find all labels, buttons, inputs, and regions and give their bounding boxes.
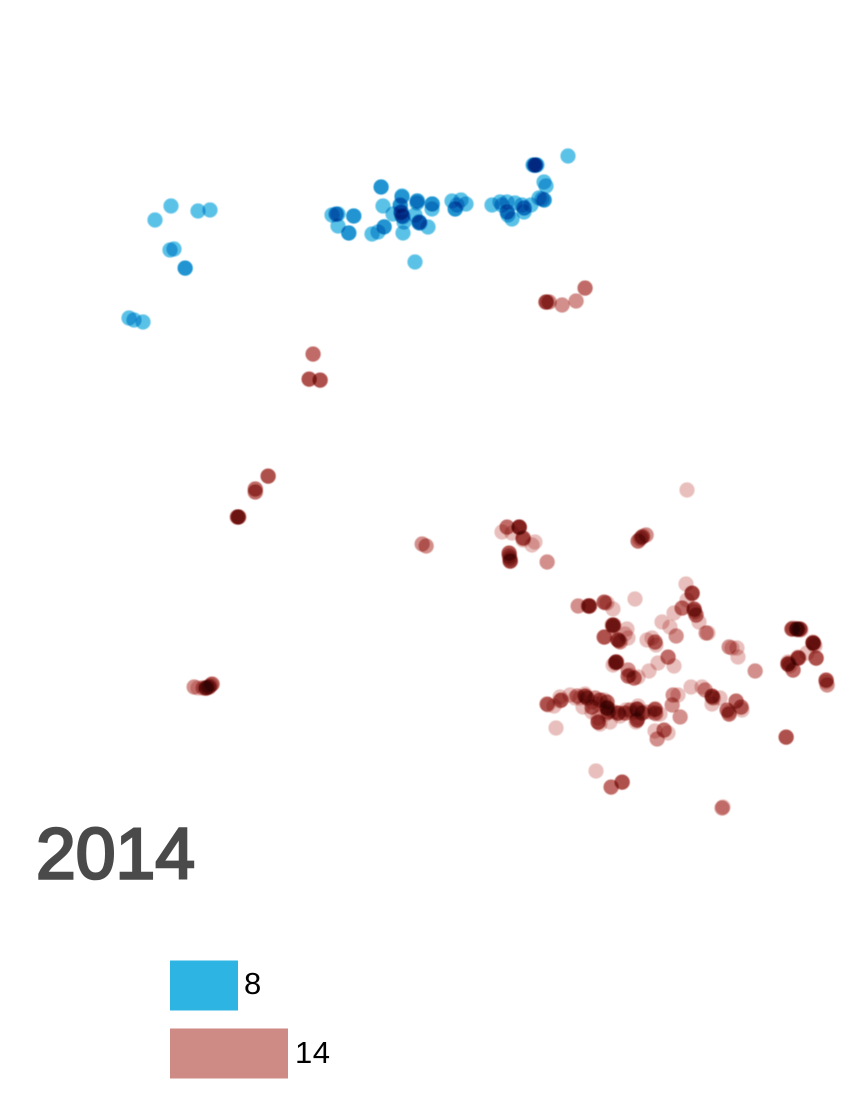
red dot cluster: main upper group [570,576,716,653]
red dot cluster: central-west group [229,346,434,554]
blue dot cluster: eastern group [444,148,576,227]
blue dot cluster: western scatter [121,198,218,330]
legend: red bar with count: 14 [295,1035,330,1070]
red dot cluster: south-west group [186,676,220,696]
red dot cluster: northern group [538,280,593,313]
red dot cluster: long southern strip [539,686,668,736]
blue dot cluster: central group [324,179,440,270]
legend: blue bar with count [170,960,261,1010]
red dot cluster: south-east band [664,679,750,725]
red dot cluster: middle group [494,482,695,570]
red dot cluster: far-east group [721,620,835,693]
year title: 2014 [36,814,195,894]
legend: blue bar with count: 8 [244,966,261,1001]
legend: red bar with count [170,1028,330,1078]
red dot cluster: mid band [605,649,682,686]
red dot cluster: lower scattered dots [588,722,794,816]
dot map [121,148,835,816]
